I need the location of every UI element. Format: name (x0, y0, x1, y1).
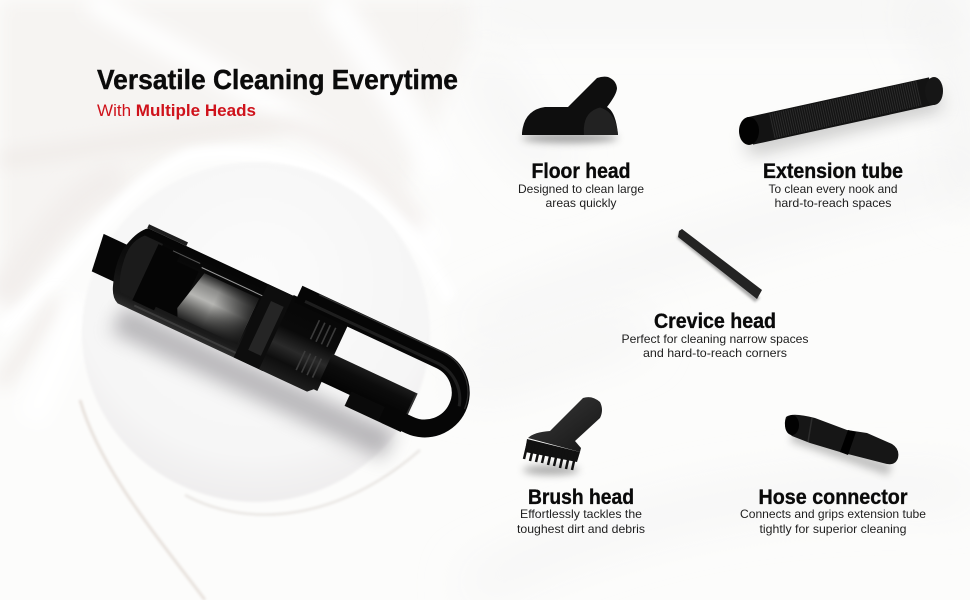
item: hose connector: tightly for superior cleaning (760, 522, 906, 536)
vent slots (296, 320, 336, 378)
description: hose connector: Connects and grips extension tube (740, 507, 926, 521)
description: brush head: Effortlessly tackles the (520, 507, 642, 521)
description: crevice head: Perfect for cleaning narrow spaces (622, 332, 808, 346)
vacuum clear dust bin (101, 222, 297, 371)
vacuum nozzle (87, 234, 133, 283)
lower handle plate (345, 391, 408, 432)
item: floor head (518, 77, 644, 210)
icon: brush head (523, 397, 602, 475)
loop handle (268, 294, 473, 440)
heading: crevice head: Crevice head (654, 310, 776, 333)
vacuum motor housing (259, 295, 350, 395)
heading: brush head: Brush head (528, 486, 634, 509)
item: crevice head: and hard-to-reach corners (643, 346, 787, 360)
heading: extension tube: Extension tube (763, 160, 903, 183)
description: extension tube: To clean every nook and (768, 182, 898, 196)
icon: extension tube (739, 77, 943, 146)
item: crevice head (622, 229, 808, 360)
item: brush head: toughest dirt and debris (517, 522, 645, 536)
icon: crevice head (677, 229, 762, 302)
vacuum cleaner (67, 201, 482, 481)
title: Versatile Cleaning Everytime (97, 64, 458, 95)
icon: hose connector (785, 415, 898, 470)
inner battery tube (320, 354, 418, 421)
item: brush head (517, 397, 645, 536)
icon: floor head (522, 77, 618, 143)
subtitle: With Multiple Heads (97, 101, 256, 120)
heading: hose connector: Hose connector (758, 486, 908, 509)
heading: floor head: Floor head (532, 160, 630, 183)
silver filter window (174, 269, 259, 345)
item: extension tube: hard-to-reach spaces (774, 196, 892, 210)
item: hose connector (740, 415, 926, 536)
description: floor head: Designed to clean large (518, 182, 644, 196)
item: floor head: areas quickly (546, 196, 616, 210)
white round disc (82, 162, 430, 502)
item: extension tube (739, 77, 943, 210)
